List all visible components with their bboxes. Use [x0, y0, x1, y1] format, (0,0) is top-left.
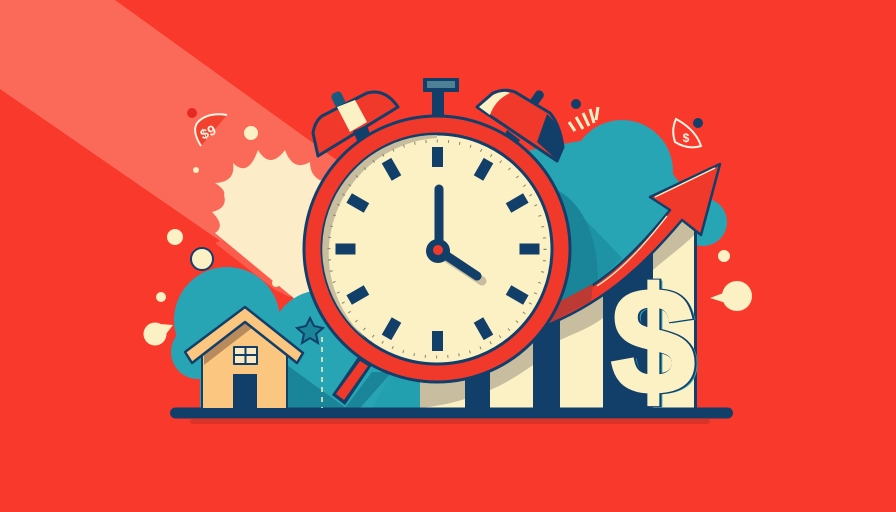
illustration: [0, 0, 752, 424]
arrow dark base: [546, 284, 593, 325]
baseline shadow: [190, 419, 710, 424]
burst splash: [212, 150, 340, 300]
ring burst lines: [569, 107, 598, 131]
clock crown: [423, 78, 459, 120]
left coin icon: $9: [198, 121, 219, 143]
house window: [234, 347, 257, 364]
left coin icon: [187, 108, 227, 146]
dollar sign: $: [612, 257, 696, 425]
star: [297, 318, 323, 343]
clock hands: [438, 189, 482, 281]
clock hub: [426, 239, 450, 263]
baseline: [170, 408, 733, 418]
minute ticks: [329, 141, 545, 357]
hour markers: [336, 147, 540, 351]
house: [185, 307, 303, 409]
left teal cloud: [171, 267, 420, 410]
arrow highlight: [597, 168, 715, 286]
dots: [156, 126, 730, 302]
right coin icon: [673, 118, 703, 147]
rising arrow: [540, 164, 720, 328]
right bell: [477, 89, 563, 161]
left teal shade: [287, 365, 420, 408]
left bell: [313, 90, 398, 156]
house body: [202, 320, 287, 409]
right coin icon: $: [683, 131, 690, 145]
clock: [304, 116, 570, 382]
left splat: [144, 322, 173, 346]
house door: [233, 374, 257, 408]
bar chart shadow band: [420, 215, 697, 408]
face shadow: [322, 135, 437, 338]
right teal cloud: [530, 120, 727, 320]
bar chart: [420, 215, 697, 415]
light beam: [0, 0, 345, 296]
lower beam strip: [215, 236, 296, 297]
house roof: [185, 307, 303, 363]
dollar sign: $: [614, 258, 698, 426]
dashed line: [321, 337, 323, 408]
clock leg: [332, 357, 372, 405]
clock body: [304, 116, 570, 382]
roof shade: [204, 322, 252, 365]
right splat: [710, 281, 752, 311]
navy dot: [571, 99, 581, 109]
clock face: [322, 134, 552, 364]
dollar sign: $: [611, 257, 695, 425]
ring dot: [191, 248, 213, 270]
